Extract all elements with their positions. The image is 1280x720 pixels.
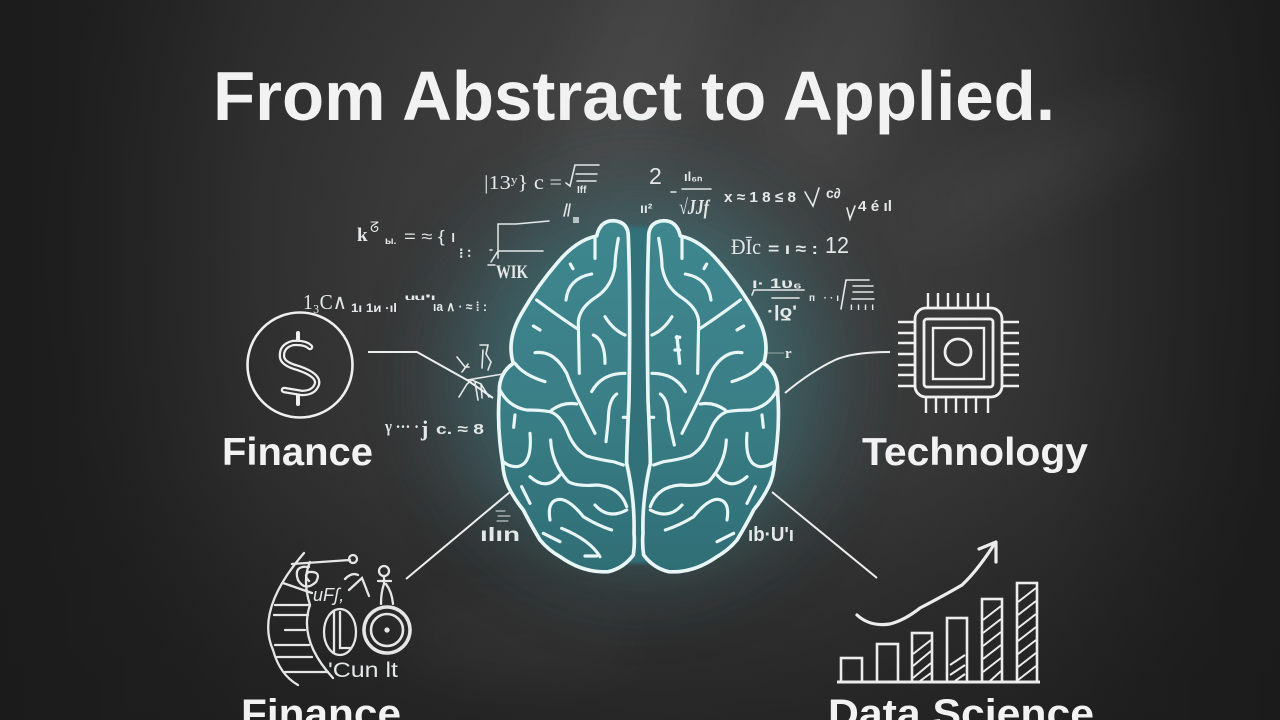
icon: dollar coin xyxy=(248,312,352,418)
formula: top center fraction: ıl₆ₙ xyxy=(684,169,702,184)
formula: middle left string: ᵘᵘ'ᶦ xyxy=(405,292,436,306)
formula: left root: ⁝ ∶ xyxy=(459,245,471,261)
formula: top center fraction: ıı² xyxy=(640,200,653,216)
icon: engineering sketch: 'Cun lt xyxy=(328,659,398,682)
formula: lower left of brain: ılın xyxy=(480,525,520,546)
formula: upper left expression: k xyxy=(357,225,368,246)
connector: lower finance to brain xyxy=(406,492,510,579)
hatching xyxy=(913,588,1036,681)
formula: right fraction and root: ı· 1ᴜ₆ xyxy=(752,275,802,291)
folds xyxy=(500,238,627,557)
connector: data science to brain xyxy=(772,492,877,578)
formula: small r mark xyxy=(767,346,792,362)
bars xyxy=(841,583,1037,682)
formula: lower left string: γ ··· · xyxy=(384,417,419,436)
formula: lower left string: j xyxy=(420,416,428,441)
left hemisphere xyxy=(499,221,634,572)
cylinder xyxy=(324,609,356,655)
figure xyxy=(379,566,389,576)
right hemisphere xyxy=(643,221,778,572)
formula: right of brain line: 12 xyxy=(825,232,849,258)
formula: lower left string xyxy=(384,416,484,441)
formula: middle left string: 1ı 1ᴎ ·ıl xyxy=(351,301,397,315)
formula: middle left string xyxy=(303,290,487,315)
formula: middle left string: 1₃C∧ xyxy=(303,290,347,314)
formula: sketch near connector xyxy=(457,345,503,400)
scribbles: uFʃ, xyxy=(313,585,344,605)
formula: top center fraction: 2 xyxy=(649,163,662,189)
arrow xyxy=(857,543,995,625)
formula: top right string: x ≈ 1 8 ≤ 8 xyxy=(724,189,796,206)
baseline xyxy=(837,680,1040,684)
formula: top left root: Iff xyxy=(577,185,587,196)
formula: lower left of brain xyxy=(480,511,520,546)
formula: right fraction and root: ·|ƍ' xyxy=(767,302,797,321)
formula: top right string xyxy=(724,185,892,219)
formula: upper left expression: = ≈ { ı xyxy=(404,227,456,246)
central fissure xyxy=(625,227,652,563)
brain glow xyxy=(415,150,865,620)
formula: right fraction and root xyxy=(752,275,874,321)
formula: lower left string: c. ≈ 8 xyxy=(436,421,484,438)
label: technology: Technology xyxy=(862,431,1088,474)
formula: right fraction and root: ıııı xyxy=(850,302,874,313)
formula: top center fraction xyxy=(640,163,711,219)
lobe fill and outline xyxy=(499,221,634,572)
icon: microchip xyxy=(898,293,1019,413)
formula: right of brain line: ÐĪc xyxy=(731,234,761,259)
math formulas cluster xyxy=(303,163,892,546)
chart: rising bars with arrow xyxy=(837,542,1040,682)
formula: middle left string: ıa ∧ · ≈ ⁞ : xyxy=(433,299,487,314)
formula: small r mark: r xyxy=(785,346,792,362)
formula: top left root: |13ʸ} c = xyxy=(484,172,562,194)
formula: right fraction and root: п ··ı xyxy=(809,293,839,304)
formula: upper left expression: ᘔ xyxy=(370,221,379,236)
formula: right of brain line xyxy=(731,232,849,259)
formula: top right string: c∂ xyxy=(826,185,841,201)
title: From Abstract to Applied. xyxy=(213,57,1055,135)
connector: finance to brain xyxy=(368,352,493,398)
gear xyxy=(364,607,410,653)
formula: right of brain line: = ı ≈ : xyxy=(768,241,818,258)
formula: top left root xyxy=(484,165,599,216)
formula: left root: WIK xyxy=(496,262,528,283)
formula: top right string: 4 é ıl xyxy=(858,198,892,215)
brain xyxy=(499,221,778,572)
icon: engineering sketch xyxy=(268,553,410,685)
outer wheel arcs xyxy=(268,553,333,685)
formula: upper left expression: ы. xyxy=(385,236,397,247)
formula: left root xyxy=(459,217,579,283)
connector: technology to brain xyxy=(785,352,890,393)
label: finance: Finance xyxy=(222,431,373,474)
formula: lower right of brain: ıb·U'ı xyxy=(748,524,794,546)
formula: upper left expression xyxy=(357,221,456,247)
formula: top center fraction: √JJf xyxy=(679,195,711,219)
